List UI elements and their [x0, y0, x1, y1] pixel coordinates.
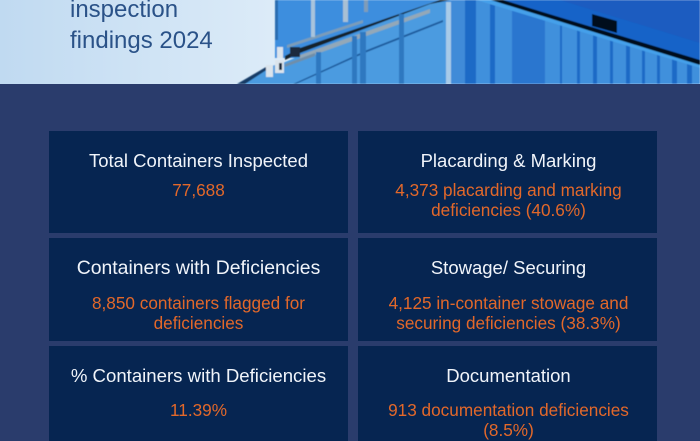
value: deficiencies (40.6%): [431, 200, 586, 220]
panel: documentation: [358, 346, 657, 441]
value: [92, 293, 305, 333]
heading: Total Containers Inspected: [89, 150, 308, 171]
value: [388, 400, 629, 440]
value: securing deficiencies (38.3%): [396, 313, 621, 333]
heading: Stowage/ Securing: [431, 257, 586, 278]
value: 77,688: [172, 180, 225, 200]
heading: Placarding & Marking: [421, 150, 596, 171]
heading: % Containers with Deficiencies: [71, 365, 326, 386]
value: 913 documentation deficiencies: [388, 400, 629, 420]
lower container left face: [237, 0, 470, 84]
value: 11.39%: [170, 400, 227, 420]
corner castings: [266, 47, 284, 77]
panel: containers with deficiencies: [49, 238, 348, 341]
value: 8,850 containers flagged for: [92, 293, 305, 313]
upper container: [275, 0, 480, 58]
ribbed right face: [465, 0, 700, 84]
value: 4,125 in-container stowage and: [389, 293, 628, 313]
value: (8.5%): [483, 420, 534, 440]
heading: Containers with Deficiencies: [77, 257, 320, 279]
value: deficiencies: [154, 313, 243, 333]
title: findings 2024: [70, 27, 213, 54]
panel: placarding and marking: [358, 131, 657, 233]
heading: Documentation: [446, 365, 571, 386]
value: [389, 293, 628, 333]
value: [395, 180, 622, 220]
panel: stowage and securing: [358, 238, 657, 341]
panel: total containers inspected: [49, 131, 348, 233]
value: 4,373 placarding and marking: [395, 180, 622, 200]
title: [70, 0, 213, 54]
header photo: shipping containers against sky: [0, 0, 700, 84]
panel: percent containers with deficiencies: [49, 346, 348, 441]
